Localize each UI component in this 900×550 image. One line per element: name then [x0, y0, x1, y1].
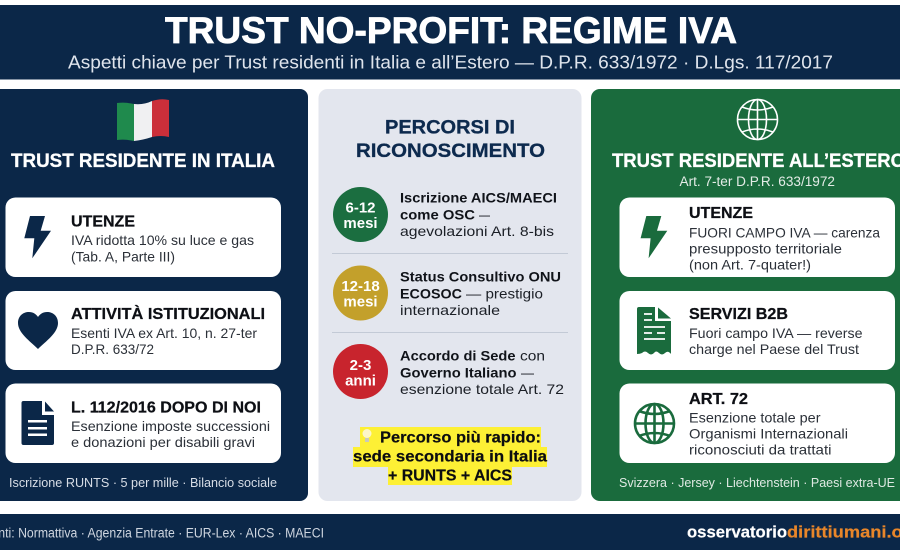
card: servizi B2B — [620, 291, 895, 370]
card text: IVA ridotta 10% su luce e gas — [71, 232, 254, 248]
callout: percorso più rapido: Percorso più rapido: — [380, 430, 541, 446]
step text: — prestigio — [466, 286, 543, 302]
card text: presupposto territoriale — [689, 240, 842, 256]
card title: UTENZE — [71, 214, 135, 230]
icon: lightning bolt — [24, 216, 51, 258]
subheading: Art. 7-ter D.P.R. 633/1972 — [680, 174, 835, 189]
card text: (non Art. 7-quater!) — [689, 256, 811, 272]
title: TRUST NO-PROFIT: REGIME IVA — [165, 10, 737, 51]
badge: 2-3 anni: 2-3 — [350, 357, 371, 374]
heading: PERCORSI DI — [385, 118, 515, 138]
website — [687, 524, 900, 542]
card text: Esenzione imposte successioni — [71, 418, 270, 434]
card title: ART. 72 — [689, 391, 748, 408]
icon: receipt — [637, 307, 671, 354]
card title: L. 112/2016 DOPO DI NOI — [71, 400, 261, 416]
heading: RICONOSCIMENTO — [356, 141, 545, 162]
badge: 12-18 mesi: 12-18 — [341, 278, 380, 295]
icon: globe — [635, 404, 674, 443]
card title: SERVIZI B2B — [689, 306, 788, 323]
step text: Accordo di Sede — [400, 348, 516, 364]
card title: ATTIVITÀ ISTITUZIONALI — [71, 304, 265, 323]
card: attività istituzionali — [6, 291, 281, 370]
panel: trust residente all'estero — [591, 89, 900, 501]
card text — [71, 418, 270, 450]
card text — [71, 325, 257, 357]
icon: lightning bolt — [641, 216, 667, 258]
step: accordo di sede — [333, 344, 564, 399]
badge: 12-18 mesi: mesi — [343, 294, 378, 310]
card: utenze — [6, 198, 281, 277]
card text: Esenti IVA ex Art. 10, n. 27-ter — [71, 325, 257, 341]
panel footnote: Iscrizione RUNTS · 5 per mille · Bilancio sociale — [9, 475, 277, 490]
step text: ECOSOC — [400, 286, 462, 302]
badge: 6-12 mesi: 6-12 — [345, 200, 376, 216]
card text — [689, 224, 880, 272]
icon: heart — [18, 312, 58, 349]
heading — [356, 118, 545, 162]
badge: 6-12 mesi: mesi — [343, 215, 378, 232]
icon: Italian flag — [117, 99, 169, 141]
step text: — — [521, 364, 534, 380]
card text: (Tab. A, Parte III) — [71, 248, 175, 264]
header banner — [0, 5, 900, 80]
step text: come OSC — [400, 206, 475, 222]
badge: 2-3 anni: anni — [345, 372, 376, 390]
card text: Esenzione totale per — [689, 410, 821, 426]
panel: trust residente in Italia — [0, 89, 308, 501]
step text: internazionale — [400, 302, 500, 318]
card text: Fuori campo IVA — reverse — [689, 325, 863, 341]
badge: 6-12 mesi — [333, 187, 388, 242]
step text: con — [520, 348, 545, 364]
card text — [689, 325, 863, 357]
step text: esenzione totale Art. 72 — [400, 381, 564, 397]
card text: charge nel Paese del Trust — [689, 341, 859, 357]
step text — [400, 190, 557, 239]
callout: percorso più rapido: + RUNTS + AICS — [388, 468, 512, 484]
subtitle: Aspetti chiave per Trust residenti in Italia e all’Estero — D.P.R. 633/1972 · D.Lgs. 117/2017 — [68, 52, 833, 72]
icon: light bulb — [362, 429, 372, 442]
card text: e donazioni per disabili gravi — [71, 434, 255, 450]
card: L. 112/2016 dopo di noi — [6, 384, 281, 463]
step: ECOSOC — [333, 266, 561, 320]
heading: trust residente in Italia: TRUST RESIDENTE IN ITALIA — [11, 151, 275, 172]
panel footnote: Svizzera · Jersey · Liechtenstein · Paesi extra-UE — [619, 475, 895, 490]
step text — [400, 348, 564, 397]
step text: Governo Italiano — [400, 364, 516, 380]
badge: 2-3 anni — [333, 344, 388, 399]
step text: Status Consultivo ONU — [400, 268, 561, 284]
card: art. 72 — [620, 384, 895, 463]
card: utenze fuori campo — [620, 198, 895, 277]
card title: UTENZE — [689, 205, 753, 222]
card text: Organismi Internazionali — [689, 426, 848, 442]
callout: percorso più rapido — [353, 427, 547, 485]
step text: agevolazioni Art. 8-bis — [400, 223, 554, 239]
step text: Iscrizione AICS/MAECI — [400, 190, 557, 206]
step text: — — [479, 206, 490, 222]
card text — [71, 232, 254, 264]
card text: FUORI CAMPO IVA — carenza — [689, 224, 880, 240]
step: AICS/MAECI — [333, 187, 557, 242]
badge: 12-18 mesi — [333, 266, 388, 320]
icon: globe outline — [738, 100, 778, 140]
footer bar — [0, 514, 900, 550]
panel: percorsi di riconoscimento — [318, 89, 582, 501]
callout: percorso più rapido: sede secondaria in Italia — [353, 448, 547, 466]
icon: document — [22, 401, 54, 445]
step text — [400, 268, 561, 318]
card text: riconosciuti da trattati — [689, 442, 832, 458]
card text — [689, 410, 848, 458]
website: osservatorio — [687, 524, 787, 542]
card text: D.P.R. 633/72 — [71, 341, 154, 357]
